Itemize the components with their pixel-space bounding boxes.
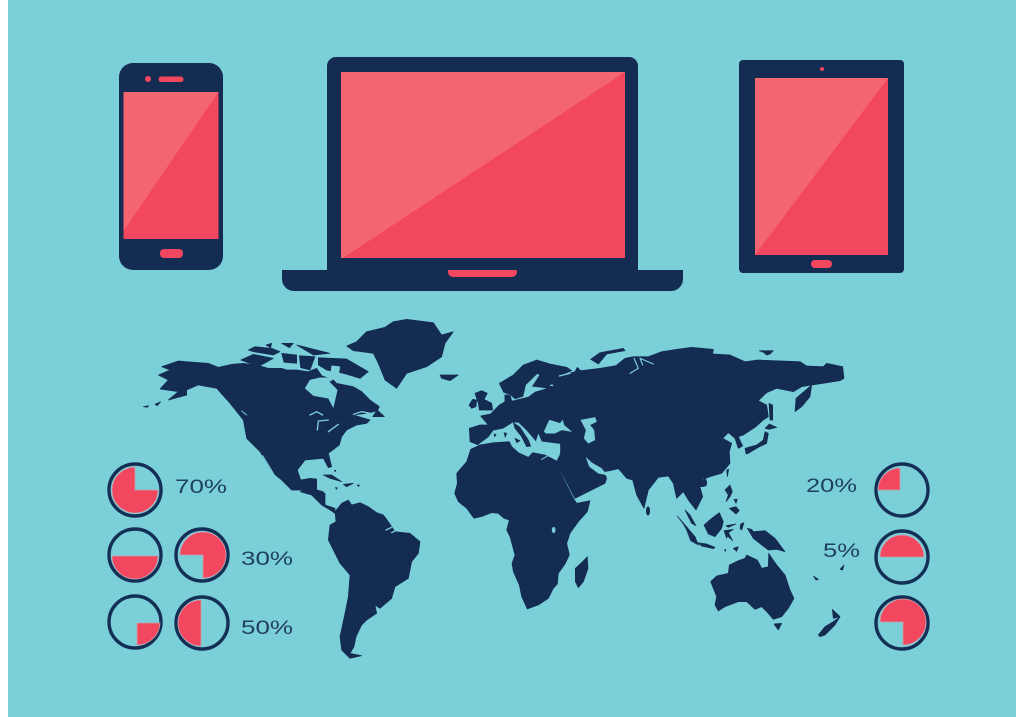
map: Africa (455, 442, 590, 609)
label: 5%: 5% (823, 541, 860, 562)
Ireland (469, 399, 477, 408)
Madagascar (575, 557, 588, 588)
dial: half lower (109, 529, 161, 581)
Asia mainland (617, 347, 844, 510)
label: 50%: 50% (241, 618, 293, 639)
Mediterranean islands (494, 433, 520, 443)
Persian Gulf (586, 457, 607, 475)
phone screen (124, 92, 218, 239)
Australia (711, 553, 794, 619)
Sri Lanka (646, 507, 650, 515)
Caspian Sea (581, 417, 597, 443)
Novaya Zemlya (591, 348, 625, 364)
Italy (513, 423, 531, 447)
tablet home button (811, 260, 832, 268)
South America mainland (328, 500, 420, 658)
laptop notch (448, 270, 517, 277)
phone speaker (158, 76, 184, 82)
Greenland (347, 319, 453, 388)
Philippines (725, 485, 739, 514)
phone screen highlight (124, 92, 218, 231)
Tasmania (774, 623, 782, 630)
Java (697, 543, 715, 549)
dial: half left (176, 597, 228, 649)
West coast gaps (226, 400, 274, 474)
Sakhalin (769, 403, 773, 420)
Newfoundland (373, 410, 384, 417)
world map (143, 319, 844, 658)
map: Greenland and Iceland (347, 319, 458, 388)
map: Europe and West Asia (469, 348, 633, 498)
White Sea and Ladoga (551, 373, 570, 385)
tablet screen highlight (755, 78, 888, 255)
Africa mainland (455, 442, 590, 609)
dial: half upper (876, 531, 928, 583)
laptop screen highlight (341, 72, 625, 258)
Caribbean islands (323, 470, 359, 489)
dial: 70% three-quarter top row (109, 464, 161, 516)
Europe and West Asia land (469, 360, 633, 498)
Malay peninsula tip (685, 510, 696, 526)
map: South America (300, 490, 420, 658)
Great Britain (475, 391, 493, 410)
New Guinea (747, 528, 785, 552)
Lake Victoria (552, 527, 555, 533)
tablet screen (755, 78, 888, 255)
Mediterranean Sea (478, 423, 560, 457)
Baltic Sea (503, 374, 546, 401)
phone camera (145, 76, 151, 82)
label: 20%: 20% (806, 476, 857, 497)
Amazon mouth (386, 527, 397, 533)
phone home button (160, 249, 183, 258)
tablet camera (820, 67, 824, 71)
Severnaya island (759, 351, 773, 355)
Timor (724, 547, 738, 551)
Aleutians (143, 402, 161, 407)
Taiwan (727, 469, 729, 477)
map: North America (143, 343, 384, 505)
Arctic islands (241, 343, 368, 378)
icon: smartphone (119, 63, 223, 270)
Iceland (440, 375, 458, 381)
icon: tablet (739, 60, 904, 273)
Hokkaido (765, 424, 777, 429)
Pacific islets (813, 565, 844, 580)
label: 30%: 30% (241, 549, 293, 570)
label: 70%: 70% (175, 477, 227, 498)
dial: quarter upper left (876, 464, 928, 516)
Sumatra (677, 516, 698, 545)
Kamchatka island (795, 385, 812, 412)
map: Southeast Asia and Oceania (677, 510, 844, 637)
Nile delta gap (542, 455, 549, 459)
Black Sea (544, 420, 572, 433)
North America mainland (158, 361, 379, 505)
Sulawesi and Moluccas (724, 523, 744, 541)
dial: three-quarter (176, 529, 228, 581)
Central America (300, 490, 335, 513)
map: Asia (617, 347, 844, 515)
Hainan (703, 479, 707, 486)
Great Lakes (310, 412, 370, 432)
laptop base (282, 270, 683, 291)
dial: quarter lower right (109, 596, 161, 648)
Ob Gulf and Arctic inlets (630, 358, 653, 373)
Hudson Bay (305, 366, 340, 408)
Denmark (505, 395, 512, 402)
chart group: right progress dials (806, 464, 928, 649)
chart group: left progress dials (109, 464, 293, 649)
New Zealand (818, 609, 840, 637)
icon: laptop (282, 57, 683, 291)
laptop screen (341, 72, 625, 258)
Honshu (745, 432, 768, 454)
dial: three-quarter lower (876, 597, 928, 649)
Borneo (704, 513, 723, 537)
